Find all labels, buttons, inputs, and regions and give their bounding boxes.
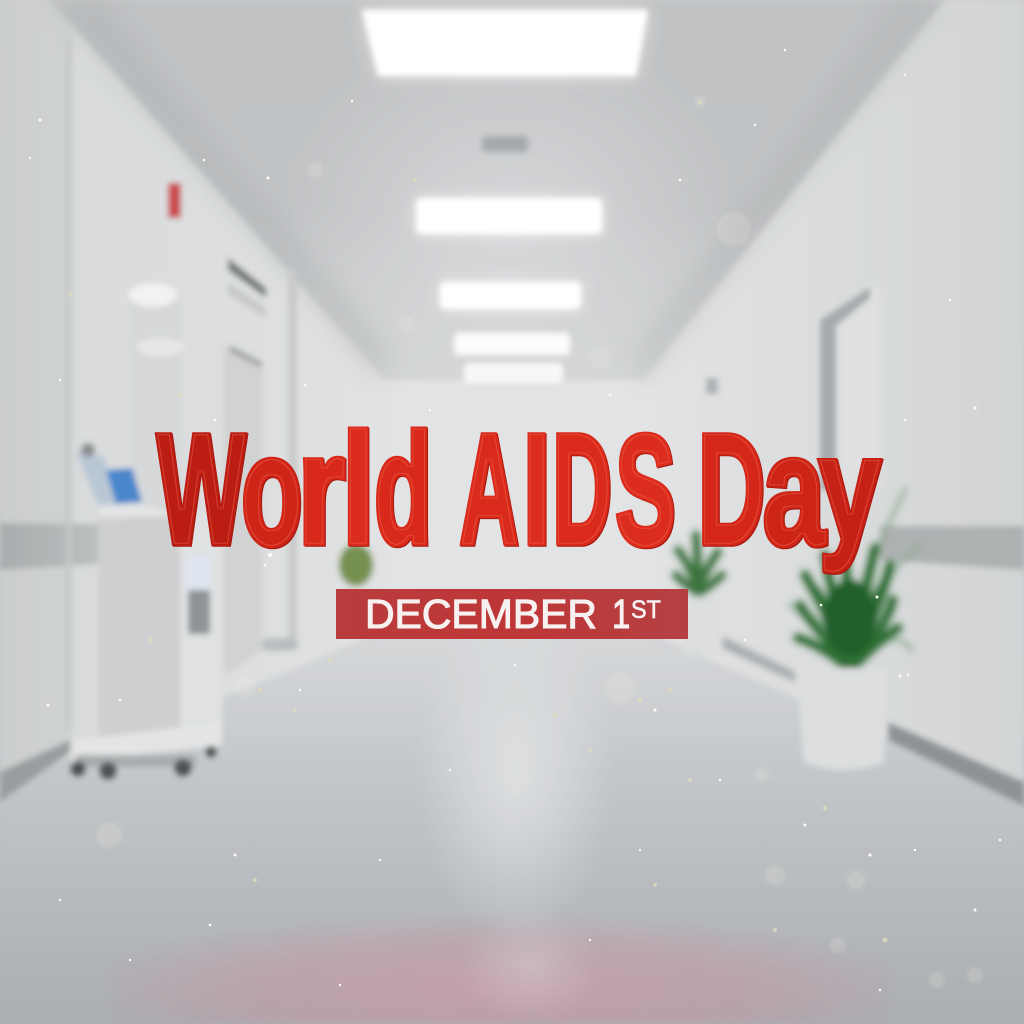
left ceiling corner shade [50,0,385,385]
date banner [336,589,688,639]
banner background [336,589,688,639]
title: World AIDS Day: y [818,405,880,573]
left door frames [66,40,298,730]
title: World AIDS Day: d [374,400,432,577]
title: World AIDS Day: r [297,401,345,576]
ceiling light 1 [362,10,648,76]
banner date number: 1 [612,590,630,637]
floor red reflection [110,885,890,1024]
medical cart [70,443,222,780]
planter [796,668,888,770]
ceiling light 2 [416,198,602,234]
banner ordinal: ST [631,596,661,624]
title: World AIDS Day: o [241,402,302,577]
far plant left [339,544,373,586]
title: World AIDS Day: W [157,402,246,577]
left handrail [0,523,100,570]
left wall [0,0,388,790]
right ceiling corner shade [640,0,945,385]
right wall [640,0,1024,800]
title: World AIDS Day: I [522,400,551,576]
banner text: DECEMBER [365,591,597,637]
floor sheen [415,600,615,940]
title: World AIDS Day: D [552,400,612,577]
warm specks [68,100,888,943]
fire alarm [168,183,181,218]
title: World AIDS Day: a [762,402,826,577]
title: World AIDS Day [157,400,880,578]
ceiling light 5 [464,363,563,383]
title: World AIDS Day: S [615,403,676,578]
ceiling glow [280,20,740,440]
near plant [790,490,920,770]
ceiling light 3 [440,282,581,309]
right handrail [880,526,1024,570]
ceiling vent [482,136,528,152]
right door [706,285,880,490]
title: World AIDS Day: l [342,401,375,577]
title: World AIDS Day: D [698,402,765,577]
far plant right [676,535,722,655]
floor reflection centre [460,907,600,1023]
left skirting [0,740,70,802]
end wall [385,380,643,640]
ceiling light 4 [454,333,570,355]
floor [0,632,1024,1024]
back right skirting [722,636,795,682]
ceiling [50,0,945,385]
right skirting [888,722,1024,806]
title: World AIDS Day: A [459,401,518,577]
bokeh discs [96,96,983,988]
